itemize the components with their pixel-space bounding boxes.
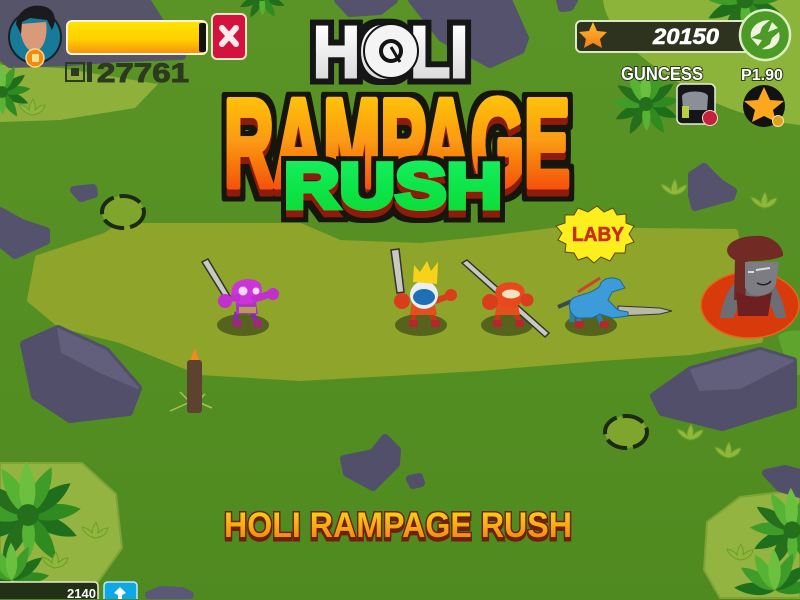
rock: top left (0, 0, 182, 64)
HUD: score counter: 27761 (97, 58, 189, 88)
HUD: price label: P1.90 (741, 67, 783, 84)
HUD: green refresh button (740, 10, 790, 60)
HUD: star item icon (743, 85, 785, 127)
grass island: top right (603, 0, 800, 125)
character: blue beast with spear (558, 278, 672, 336)
title line: HOLI: HOLI (313, 13, 468, 93)
title line: RUSH: RUSH (284, 150, 502, 222)
olive battle path (30, 226, 760, 378)
rock: big left highlight (58, 329, 138, 388)
rock: big right highlight (691, 351, 793, 390)
HUD: score counter (66, 58, 189, 88)
rock: top centre small (338, 0, 394, 13)
HUD: star score bar (576, 21, 750, 52)
boss: grey giant in red hat (701, 236, 799, 338)
caption: bottom game title: HOLI RAMPAGE RUSH (224, 506, 572, 545)
HUD: player avatar (9, 6, 61, 67)
HUD: health bar (67, 21, 207, 54)
grass island: right edge (778, 331, 800, 375)
spawn hole: right (605, 416, 647, 448)
HUD: bottom counter (0, 582, 98, 600)
grass island: bottom right (704, 490, 800, 598)
HUD: robot item icon (677, 84, 718, 126)
HUD: close button (212, 14, 246, 59)
rock: big left (24, 329, 138, 419)
HUD: GUNCESS label: GUNCESS (621, 64, 703, 84)
callout: LABY starburst: LABY (572, 224, 625, 246)
HUD: blue button (104, 582, 137, 599)
title: HOLI RAMPAGE RUSH logo (224, 13, 570, 222)
callout: LABY starburst (556, 206, 634, 263)
rock: centre pebble (410, 477, 421, 485)
wooden torch post (170, 348, 212, 413)
rock: bottom centre (149, 590, 190, 595)
spawn hole: left (102, 196, 144, 228)
rock: small left (74, 188, 94, 198)
rock: top centre large (412, 0, 525, 64)
rock: bottom right (766, 469, 800, 494)
character: orange fighter (462, 260, 549, 337)
title O emblem (364, 24, 418, 78)
rock: right upper (692, 167, 733, 207)
character: orange fighter with yellow hair (391, 249, 457, 336)
rock: top small square (560, 0, 574, 8)
rock: centre (344, 438, 397, 487)
grass island: bottom left (0, 463, 122, 582)
grass island: top left (0, 65, 158, 122)
HUD: star score bar: 20150 (652, 24, 720, 49)
rock: big right (654, 351, 793, 427)
rock: left edge (0, 211, 46, 255)
character: purple fighter (202, 259, 279, 336)
